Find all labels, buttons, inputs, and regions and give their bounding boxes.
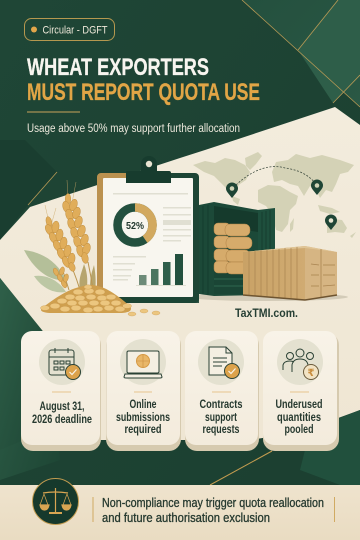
grain pile	[40, 285, 160, 316]
card 3: contracts	[185, 331, 259, 451]
icon: laptop	[124, 351, 162, 378]
green container	[188, 202, 348, 301]
icon: scales medallion	[32, 478, 78, 524]
card 2: online submissions	[106, 331, 181, 451]
donut chart: 52%	[126, 221, 144, 232]
bottom band	[0, 485, 360, 540]
icon: people and rupee coin: ₹	[308, 368, 315, 379]
card 4 text: Underused	[276, 397, 322, 411]
card 3 text: support	[205, 410, 237, 424]
warning text: and future authorisation exclusion	[102, 510, 270, 525]
status pill: Circular - DGFT	[42, 24, 108, 36]
card 4 text	[276, 397, 322, 436]
card 1: deadline	[21, 331, 101, 451]
route arc	[236, 167, 318, 187]
wheat leaves	[24, 250, 96, 292]
card 2 text: Online	[130, 397, 157, 411]
title: WHEAT EXPORTERS	[27, 54, 209, 81]
card 1 text: August 31,	[40, 399, 84, 413]
wheat ears	[43, 180, 93, 290]
icon: document	[209, 347, 240, 378]
paper lines	[113, 193, 191, 286]
bar chart	[139, 254, 183, 285]
subtitle: Usage above 50% may support further allocation	[27, 123, 240, 135]
card 3 text: requests	[202, 422, 240, 436]
status pill	[24, 18, 114, 40]
card 2 text: submissions	[116, 410, 170, 424]
card 1 text: 2026 deadline	[32, 412, 92, 426]
card 1 text	[32, 399, 92, 426]
card 2 text	[116, 397, 170, 436]
warning text	[93, 495, 334, 525]
card 4: underused quantities	[263, 331, 339, 451]
icon: calendar	[49, 348, 80, 380]
sacks	[214, 223, 252, 274]
card 3 text: Contracts	[200, 397, 243, 411]
card 4 text: pooled	[284, 422, 314, 436]
title: MUST REPORT QUOTA USE	[27, 79, 260, 106]
card 4 text: quantities	[277, 410, 321, 424]
card 3 text	[200, 397, 243, 436]
donut chart	[118, 207, 153, 242]
world map	[193, 152, 356, 238]
clipboard clip	[126, 156, 171, 183]
brand: TaxTMI.com.	[235, 308, 298, 320]
title	[27, 54, 260, 106]
tan container	[243, 246, 337, 300]
map pins	[226, 180, 337, 230]
clipboard	[97, 156, 199, 303]
card 2 text: required	[124, 422, 162, 436]
